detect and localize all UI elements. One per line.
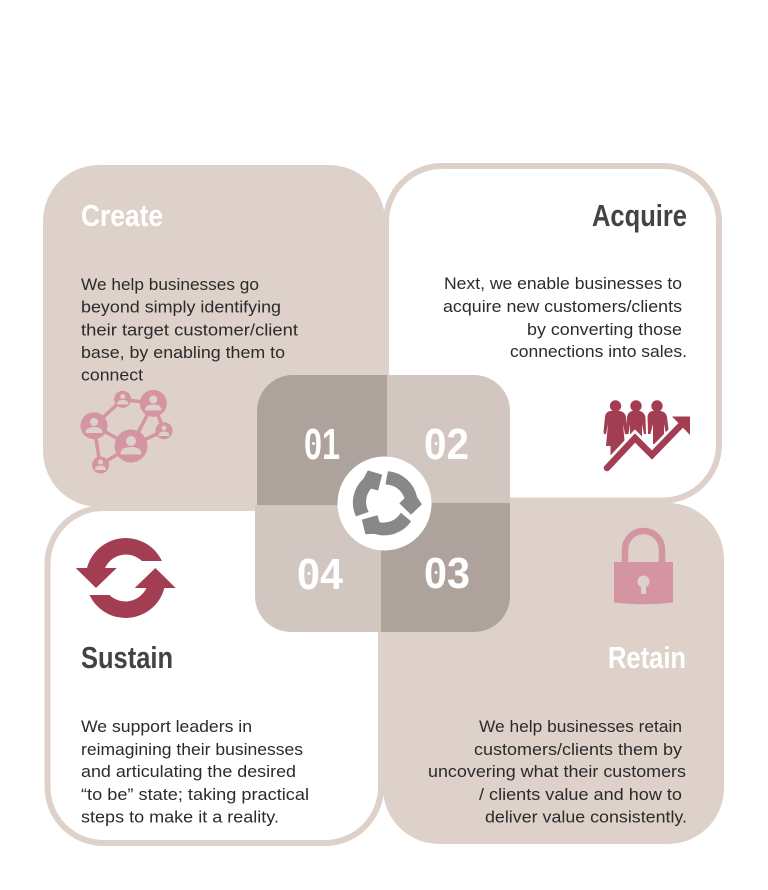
quadrant 03: 03 [424,549,470,598]
panel: create content [80,198,298,474]
text block: acquire description: acquire new customers/clients [443,297,682,316]
text block: acquire description: connections into sales. [510,342,687,361]
quadrant 03 [381,503,510,632]
heading: retain: Retain [608,640,686,675]
panel: sustain content [76,538,309,826]
text block: sustain description: “to be” state; taking practical [81,785,309,804]
quadrant 04: 04 [297,550,343,599]
panel: acquire content [443,198,690,468]
panel: acquire background [386,166,719,500]
text block: retain description [428,717,687,826]
icon: cycle arrows [340,466,421,550]
center circle [338,456,432,550]
quadrant 01: 01 [304,420,340,469]
text block: create description: beyond simply identifying [81,298,281,316]
heading: create: Create [81,198,163,233]
panel: sustain background [48,508,381,843]
text block: create description: We help businesses go [81,275,259,294]
quadrant 04 [255,505,381,632]
icon: padlock [614,531,673,604]
heading: sustain: Sustain [81,640,173,675]
icon: people network [80,390,172,474]
quadrant 02 [387,375,510,503]
text block: retain description: uncovering what their customers [428,762,686,781]
text block: create description [81,275,298,384]
text block: acquire description: Next, we enable businesses to [444,274,682,293]
text block: sustain description [81,717,309,826]
heading: acquire: Acquire [592,198,687,233]
text block: sustain description: reimagining their businesses [81,740,303,759]
text block: create description: connect [81,366,143,384]
text block: retain description: / clients value and how to [479,785,682,804]
panel: retain content [428,531,687,826]
text block: acquire description: by converting those [527,320,682,339]
panel: create background [43,165,385,507]
icon: team and growth arrow [604,400,690,468]
text block: sustain description: and articulating the desired [81,762,296,781]
text block: acquire description [443,274,687,361]
text block: sustain description: steps to make it a reality. [81,808,279,826]
text block: retain description: customers/clients them by [474,740,683,759]
text block: create description: their target customer/client [81,320,298,340]
icon: circular refresh arrows [76,538,176,618]
text block: retain description: We help businesses retain [479,717,682,736]
quadrant 01 [257,375,387,505]
text block: retain description: deliver value consistently. [485,808,687,826]
quadrant 02: 02 [424,420,469,469]
text block: sustain description: We support leaders in [81,717,252,736]
text block: create description: base, by enabling them to [81,343,285,362]
panel: retain background [383,503,724,844]
center cycle block [255,375,510,632]
